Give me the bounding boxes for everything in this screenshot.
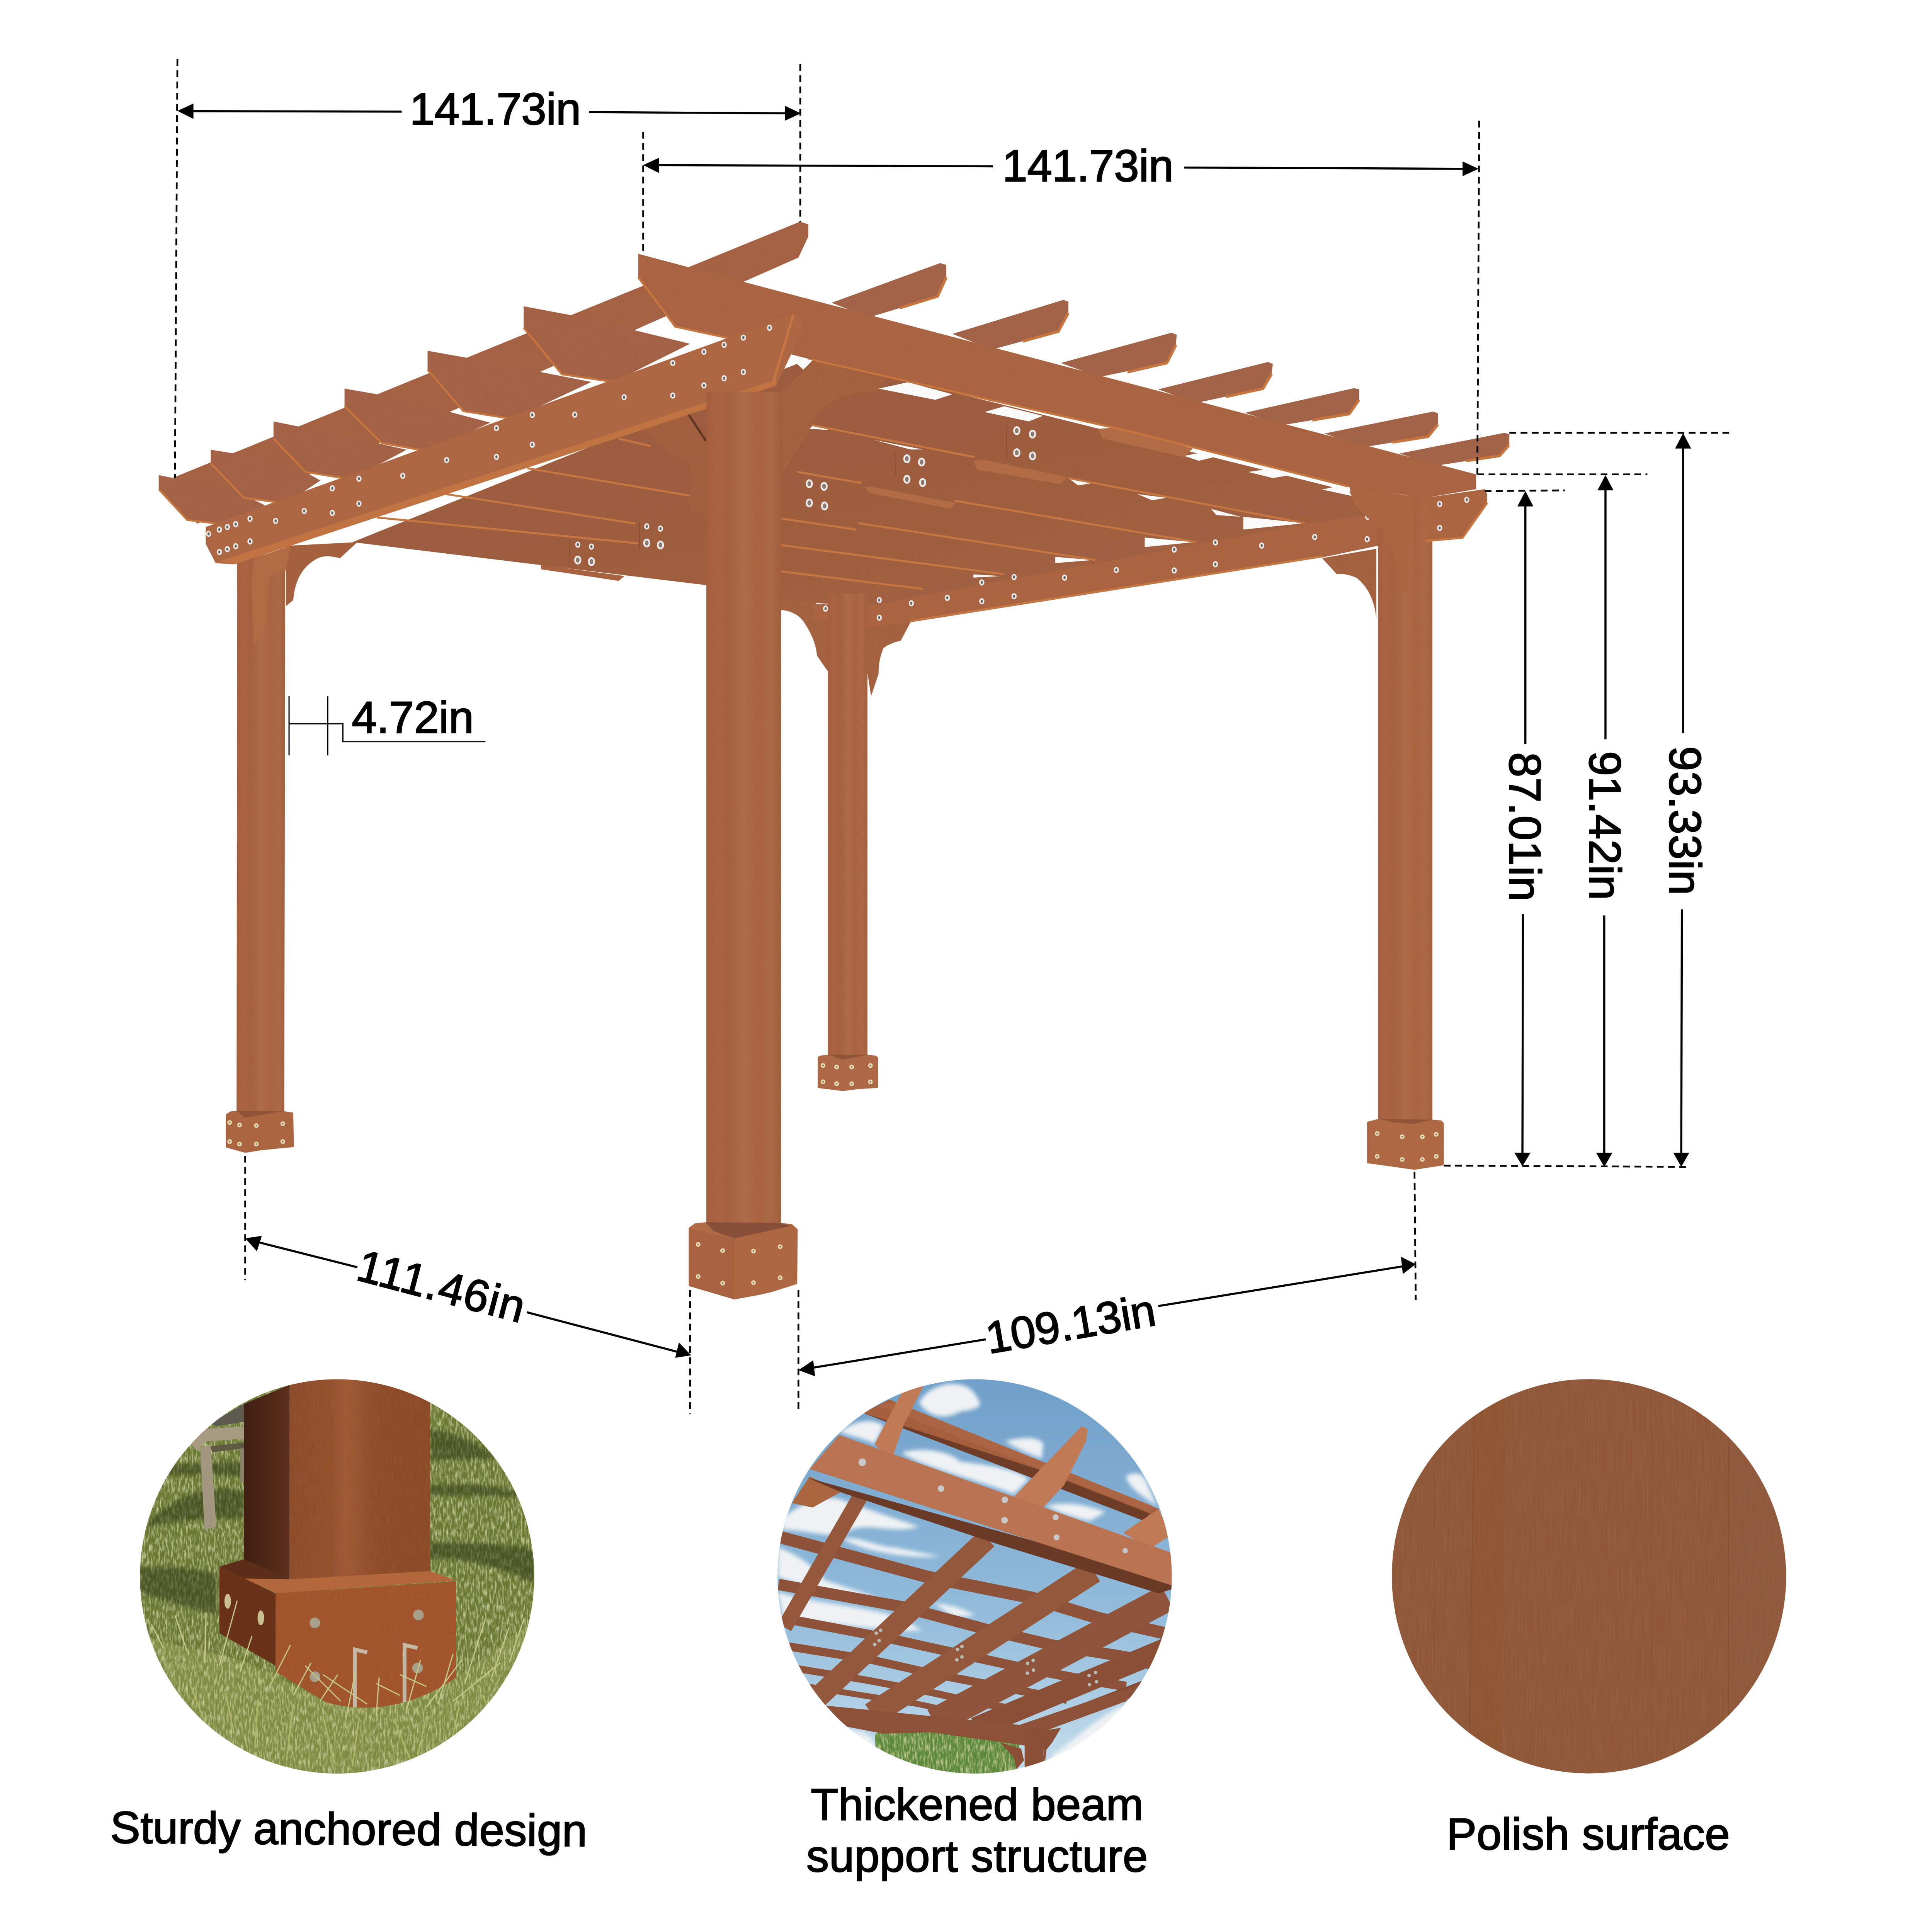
far beam — [863, 1400, 1158, 1521]
right post — [1322, 495, 1444, 1170]
front beam and post — [826, 1684, 1141, 1772]
left rafter ends — [159, 306, 690, 525]
dimension: height 91.42in — [1477, 474, 1647, 1167]
lower right beam — [813, 514, 1379, 627]
underside rafters — [352, 357, 1379, 606]
wood stripes — [1434, 1379, 1788, 1774]
tree — [875, 1729, 1020, 1775]
front centre post — [689, 392, 798, 1299]
photo circle: polished wood surface — [1392, 1379, 1788, 1774]
diagonal beams — [784, 1497, 1167, 1734]
photo circle: beams from below — [777, 1379, 1173, 1775]
right top beam — [638, 254, 1487, 594]
grass ground — [139, 1379, 536, 1775]
dimension: top right width 141.73in — [643, 121, 1479, 474]
dimension: top left width 141.73in: 141.73in — [410, 84, 581, 134]
dimension: height 93.33in — [1509, 433, 1734, 1167]
post front face — [289, 1376, 430, 1579]
pergola illustration — [159, 222, 1509, 1299]
beam bolts — [823, 514, 1370, 621]
clouds — [778, 1384, 1157, 1772]
dimension: depth 111.46in: 111.46in — [352, 1240, 531, 1332]
ground shadows — [139, 1429, 534, 1616]
photo circle: anchored post base — [139, 1376, 536, 1775]
rafter lit strips — [377, 425, 1305, 589]
dimension: width 109.13in: 109.13in — [982, 1285, 1159, 1363]
joint bolts — [873, 1628, 1098, 1686]
rear left bracket — [641, 414, 707, 514]
left post — [226, 542, 357, 1153]
label: thickened beam: Thickened beam — [811, 1779, 1143, 1830]
rafter ends right — [832, 263, 1509, 466]
sky — [777, 1379, 1173, 1775]
thin rafters — [779, 1537, 1165, 1714]
main beam — [808, 1435, 1173, 1593]
dimension: height 91.42in: 91.42in — [1580, 751, 1630, 900]
back post front strip — [828, 594, 867, 668]
post brackets — [781, 600, 829, 672]
beam end — [1425, 489, 1487, 541]
base — [226, 1111, 294, 1153]
back left post — [781, 594, 911, 1091]
left front beam — [206, 314, 802, 564]
anchor bolts — [355, 1645, 418, 1710]
rafter bolts — [574, 395, 1162, 566]
dimension: depth 111.46in — [245, 1156, 691, 1414]
dimension: post width 4.72in — [289, 692, 485, 755]
label: polish surface: Polish surface — [1447, 1809, 1730, 1859]
centre post base — [689, 1222, 798, 1299]
label: sturdy anchored design: Sturdy anchored design — [110, 1802, 587, 1856]
base — [1367, 1119, 1444, 1170]
label: support structure: support structure — [806, 1831, 1148, 1881]
foreground grass — [139, 1618, 536, 1775]
post base — [818, 1055, 878, 1091]
dimension: width 109.13in — [798, 1172, 1416, 1412]
lower bracket — [1322, 549, 1376, 619]
back beam — [160, 222, 808, 524]
rear bracket — [286, 542, 357, 606]
post left face — [244, 1385, 289, 1579]
gaps between rafters — [791, 359, 1352, 578]
dimension: height 87.01in: 87.01in — [1500, 752, 1550, 901]
light cross rafters — [792, 1386, 1170, 1549]
base screws — [224, 1594, 424, 1682]
dimension: height 93.33in: 93.33in — [1660, 746, 1710, 895]
beam bolts — [206, 325, 772, 555]
chair — [191, 1404, 244, 1530]
base top — [219, 1559, 289, 1593]
dimension: top right width 141.73in: 141.73in — [1002, 141, 1173, 191]
dimension: top left width 141.73in — [175, 59, 801, 478]
base left face — [219, 1567, 276, 1666]
dimension: post width 4.72in: 4.72in — [352, 692, 474, 742]
base front face — [276, 1582, 456, 1713]
dimension: height 87.01in — [1444, 490, 1688, 1167]
right curved bracket — [1349, 486, 1411, 594]
front bracket — [252, 546, 291, 647]
rafter plates — [541, 392, 1193, 581]
grass blades — [151, 1601, 524, 1766]
inner bracket — [781, 361, 886, 474]
